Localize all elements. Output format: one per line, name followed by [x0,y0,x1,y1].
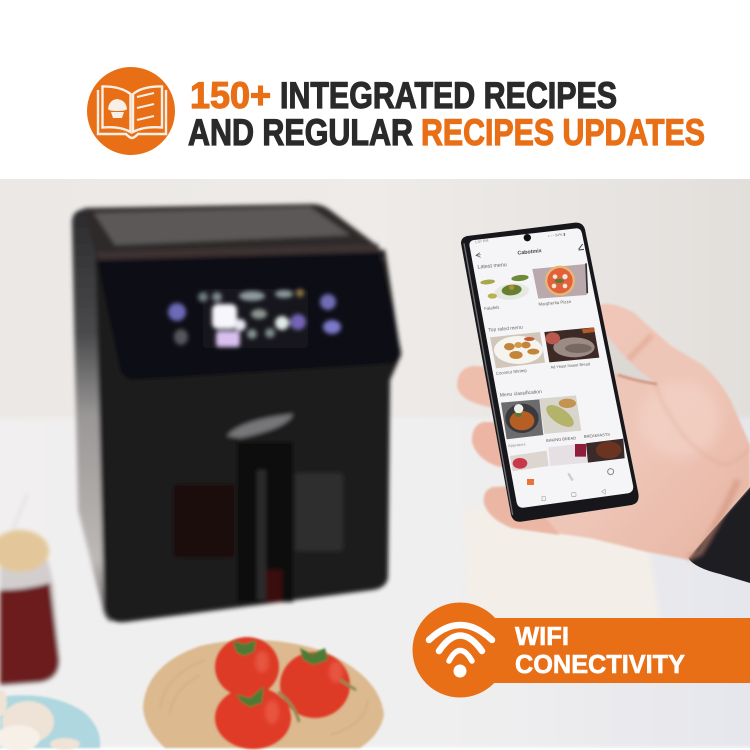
phone screen [469,228,633,508]
wrist shadow [688,480,738,558]
handle centre line [257,470,266,600]
fryer left side [72,209,112,622]
finger three [484,486,560,535]
jar lid [0,530,49,572]
heading line 1 [190,75,617,116]
label: falafels: Falafels [484,305,500,311]
edit icon [579,244,584,250]
fryer lid [84,204,386,262]
gap under thumb [606,333,655,382]
phone [461,223,639,522]
jar liquid [0,583,59,685]
camera [524,234,531,241]
food: pastry [539,395,581,434]
icon: muffin [108,99,127,118]
label: breakfasts: BREAKFASTS [584,432,610,439]
vine [278,680,356,722]
palm and thumb [510,304,750,560]
jar glass [0,560,60,686]
tomato right [280,652,350,718]
wall backdrop [0,179,750,429]
right page [133,86,162,132]
display screen [203,289,308,348]
integrated recipes: INTEGRATED RECIPES [280,75,617,116]
drawer logo [227,414,293,438]
photo: kitchen scene [0,179,750,750]
food: margherita pizza [532,264,587,299]
handle red glint [266,570,282,602]
badge circle [412,602,508,698]
tomato stems [233,640,328,707]
lid top panel [94,207,350,245]
food: sweet bread [544,327,599,362]
heading: top rated menu: Top rated menu [488,325,523,334]
app title: Cabotmix [517,248,542,257]
label: margherita pizza: Margherita Pizza [538,299,572,307]
food row bottom [510,439,625,471]
label: appetizers: Appetizers [508,442,526,448]
mushroom bowl [0,690,100,750]
and regular: AND REGULAR [188,112,413,153]
nav icon: settings [608,469,614,475]
lid front edge [97,244,380,262]
book cover [98,90,166,138]
hand holding phone [457,304,750,583]
bowl [0,695,100,748]
drawer handle [237,442,293,602]
bottom white strip [0,748,750,750]
header background [0,0,750,179]
wifi badge [412,602,750,698]
scrollbar [586,263,587,293]
food: falafels [480,274,530,301]
nav icon: menu [527,479,534,485]
sleeve [688,487,750,583]
label: sweet bread: Ad Yeast Sweet Bread [550,361,590,370]
finger two [472,422,530,472]
air fryer [72,204,401,622]
thumb knuckle shadow [628,335,652,360]
mushrooms [0,690,80,750]
icon: open book [98,86,166,138]
food: chicken bowl [501,399,543,439]
tomato top left [215,637,279,697]
honey jar [0,494,60,686]
phone edge highlight [464,243,513,515]
text lines [137,93,154,120]
wifi label: WIFI [515,621,569,651]
header: book icon badge [87,67,175,155]
tomatoes [215,637,356,749]
banner bar [460,618,750,683]
nav icon: touch [568,473,573,481]
heading: latest menu: Latest menu [477,262,507,271]
label: coconut shrimp: Coconut Shrimp [496,368,528,376]
heading line 2 [188,112,705,153]
table surface [0,418,750,748]
badge circle [87,67,175,155]
system nav buttons [542,489,605,501]
tomato front [215,687,291,749]
fryer drawer [108,372,388,622]
label: baking bread: BAKING BREAD [546,435,576,443]
palm crease [654,382,748,465]
heading: menu classification: Menu classification [500,389,542,399]
display glow [168,289,341,347]
tomato highlights [255,651,343,724]
finger one [457,366,520,415]
phone frame [461,223,639,522]
icon: wifi [429,625,492,678]
back arrow [476,253,481,257]
food: coconut shrimp [490,332,545,368]
placemat [462,500,660,625]
control panel [97,252,401,380]
web fold [618,375,657,384]
wooden plate [143,640,384,748]
palm highlight [640,382,720,458]
left page [102,86,130,132]
straw [13,494,27,530]
status icons: ▪ ▫ ▫ 54% ▮ [548,232,566,238]
status text: 1:37 PM [475,239,489,244]
window right [295,473,343,551]
plate rings [160,660,368,735]
window reflection [173,484,235,558]
fryer body [95,240,401,622]
connectivity label: CONECTIVITY [515,649,685,679]
150+: 150+ [190,75,271,116]
